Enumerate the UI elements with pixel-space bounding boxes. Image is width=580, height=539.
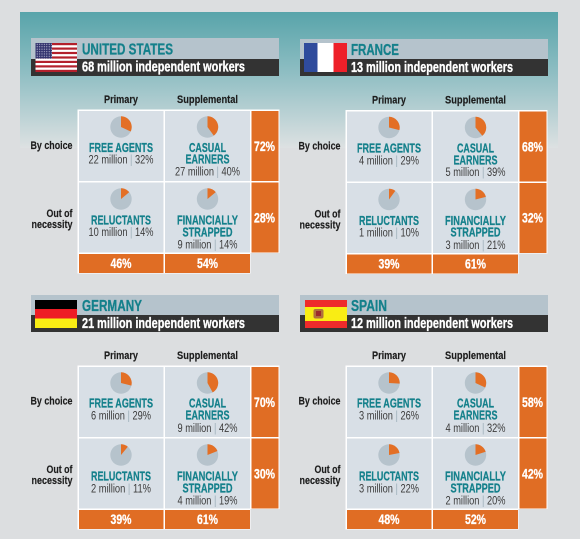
cell: free agents: 6 million | 29% xyxy=(91,410,151,422)
totals: by choice / out of necessity: 70% xyxy=(254,395,275,410)
cell: financially strapped: 9 million | 14% xyxy=(178,240,238,252)
totals: primary / supplemental xyxy=(347,510,518,529)
totals: by choice / out of necessity: 42% xyxy=(522,466,543,482)
icon: French flag xyxy=(304,43,347,72)
cell: casual earners: 9 million | 42% xyxy=(178,423,238,435)
cell: casual earners: EARNERS xyxy=(454,152,498,168)
totals: primary / supplemental: 48% xyxy=(378,512,400,527)
totals: by choice / out of necessity: 32% xyxy=(522,210,543,226)
matrix: United States: By choice xyxy=(30,140,72,152)
worker total: 13 million independent workers xyxy=(351,60,513,76)
country header: United States xyxy=(31,38,279,76)
matrix: Germany: Supplemental xyxy=(177,350,238,362)
matrix: Germany: Out of xyxy=(46,464,73,476)
matrix: United States: Out of xyxy=(46,208,73,220)
cell: free agents: FREE AGENTS xyxy=(357,140,421,156)
totals: primary / supplemental: 46% xyxy=(110,256,132,271)
totals: by choice / out of necessity: 68% xyxy=(522,140,543,154)
country name: SPAIN xyxy=(351,298,387,315)
cell: free agents: 22 million | 32% xyxy=(88,154,154,166)
matrix: Spain xyxy=(298,350,548,530)
totals: primary / supplemental: 61% xyxy=(197,512,218,527)
matrix: Spain: Primary xyxy=(372,350,407,362)
country name: FRANCE xyxy=(351,42,399,59)
cell: financially strapped: FINANCIALLY xyxy=(445,213,506,228)
matrix: United States xyxy=(30,94,280,274)
cell: free agents xyxy=(79,367,164,437)
cell: reluctants: 2 million | 11% xyxy=(91,484,151,496)
cell: reluctants xyxy=(347,183,432,253)
cell: casual earners xyxy=(433,112,518,182)
totals: primary / supplemental: 52% xyxy=(465,512,486,527)
totals: by choice / out of necessity: 28% xyxy=(254,210,275,226)
cell: free agents: 4 million | 29% xyxy=(359,156,419,168)
country header: Spain xyxy=(300,295,548,332)
panel: Germany xyxy=(30,295,280,530)
totals: primary / supplemental: 39% xyxy=(378,256,400,272)
cell: casual earners: 27 million | 40% xyxy=(175,166,240,178)
cell: free agents: 3 million | 26% xyxy=(359,410,419,422)
cell: financially strapped: STRAPPED xyxy=(182,224,232,240)
cell: casual earners: 5 million | 39% xyxy=(446,167,506,179)
totals: by choice / out of necessity xyxy=(520,112,546,253)
cell: casual earners: EARNERS xyxy=(186,408,230,422)
worker total: 68 million independent workers xyxy=(82,60,245,76)
matrix: France: Primary xyxy=(372,94,407,106)
cell: financially strapped xyxy=(433,438,518,508)
cell: casual earners: EARNERS xyxy=(454,408,498,422)
cell: reluctants: 3 million | 22% xyxy=(359,484,419,496)
cell: reluctants xyxy=(347,438,432,508)
cell: reluctants: RELUCTANTS xyxy=(359,468,419,484)
matrix: Spain: Supplemental xyxy=(445,350,506,362)
icon: German flag xyxy=(35,300,77,328)
cell: financially strapped: 2 million | 20% xyxy=(446,496,506,508)
matrix: Germany: By choice xyxy=(30,396,72,408)
cell: reluctants: RELUCTANTS xyxy=(359,213,419,228)
cell: financially strapped: 4 million | 19% xyxy=(178,496,238,508)
totals: by choice / out of necessity: 30% xyxy=(254,466,275,482)
worker total: 21 million independent workers xyxy=(82,316,245,332)
cell: financially strapped: STRAPPED xyxy=(450,480,500,496)
matrix: France: By choice xyxy=(298,140,340,152)
matrix: United States: Primary xyxy=(104,94,139,106)
country name: UNITED STATES xyxy=(82,42,173,58)
totals: primary / supplemental xyxy=(79,510,250,529)
cell: free agents: FREE AGENTS xyxy=(357,396,421,410)
icon: US flag xyxy=(36,43,77,72)
cell: financially strapped xyxy=(165,438,250,508)
totals: by choice / out of necessity xyxy=(252,111,278,252)
matrix: Germany xyxy=(30,350,280,530)
cell: financially strapped: STRAPPED xyxy=(450,224,500,240)
country header: Germany xyxy=(31,295,279,332)
totals: primary / supplemental xyxy=(347,254,518,274)
cell: free agents: FREE AGENTS xyxy=(89,140,153,155)
matrix: France: necessity xyxy=(300,220,341,232)
totals: by choice / out of necessity: 72% xyxy=(254,139,275,154)
cell: financially strapped xyxy=(165,182,250,252)
cell: reluctants: 1 million | 10% xyxy=(359,228,419,240)
icon: Spanish flag xyxy=(305,300,347,328)
totals: primary / supplemental xyxy=(79,254,250,273)
cell: casual earners: 4 million | 32% xyxy=(446,423,506,435)
cell: casual earners: EARNERS xyxy=(186,152,230,166)
matrix: Germany: necessity xyxy=(32,475,73,487)
cell: reluctants: RELUCTANTS xyxy=(91,212,151,228)
totals: by choice / out of necessity: 58% xyxy=(522,395,543,410)
matrix: France: Out of xyxy=(314,208,341,220)
cell: financially strapped: FINANCIALLY xyxy=(445,468,506,484)
matrix: France xyxy=(298,94,548,274)
cell: financially strapped: FINANCIALLY xyxy=(177,212,238,228)
cell: casual earners xyxy=(165,111,250,181)
cell: reluctants xyxy=(79,438,164,508)
cell: casual earners xyxy=(165,367,250,437)
panel: France xyxy=(298,39,548,274)
worker total: 12 million independent workers xyxy=(351,316,513,332)
matrix: United States: Supplemental xyxy=(177,94,238,106)
panel: Spain xyxy=(298,295,548,530)
cell: casual earners: CASUAL xyxy=(189,140,226,155)
totals: primary / supplemental: 39% xyxy=(110,512,132,527)
cell: free agents: FREE AGENTS xyxy=(89,396,153,410)
cell: financially strapped: STRAPPED xyxy=(182,480,232,496)
country header: France xyxy=(300,39,548,76)
cell: casual earners: CASUAL xyxy=(189,396,226,410)
cell: financially strapped: 3 million | 21% xyxy=(446,240,506,252)
country name: GERMANY xyxy=(82,298,142,315)
cell: reluctants xyxy=(79,182,164,252)
cell: free agents xyxy=(347,112,432,182)
cell: reluctants: RELUCTANTS xyxy=(91,468,151,484)
matrix: Spain: By choice xyxy=(298,396,340,408)
cell: casual earners: CASUAL xyxy=(457,140,494,156)
totals: by choice / out of necessity xyxy=(252,367,278,508)
cell: casual earners: CASUAL xyxy=(457,396,494,410)
matrix: Spain: necessity xyxy=(300,475,341,487)
teal gradient band xyxy=(20,12,558,148)
cell: financially strapped xyxy=(433,183,518,253)
matrix: Germany: Primary xyxy=(104,350,139,362)
totals: by choice / out of necessity xyxy=(520,367,546,508)
matrix: France: Supplemental xyxy=(445,94,506,106)
cell: free agents xyxy=(347,367,432,437)
cell: free agents xyxy=(79,111,164,181)
panel: United States xyxy=(30,38,280,274)
totals: primary / supplemental: 54% xyxy=(197,256,218,271)
cell: casual earners xyxy=(433,367,518,437)
totals: primary / supplemental: 61% xyxy=(465,256,486,272)
cell: reluctants: 10 million | 14% xyxy=(88,227,154,239)
matrix: Spain: Out of xyxy=(314,464,341,476)
cell: financially strapped: FINANCIALLY xyxy=(177,468,238,484)
matrix: United States: necessity xyxy=(32,219,73,231)
